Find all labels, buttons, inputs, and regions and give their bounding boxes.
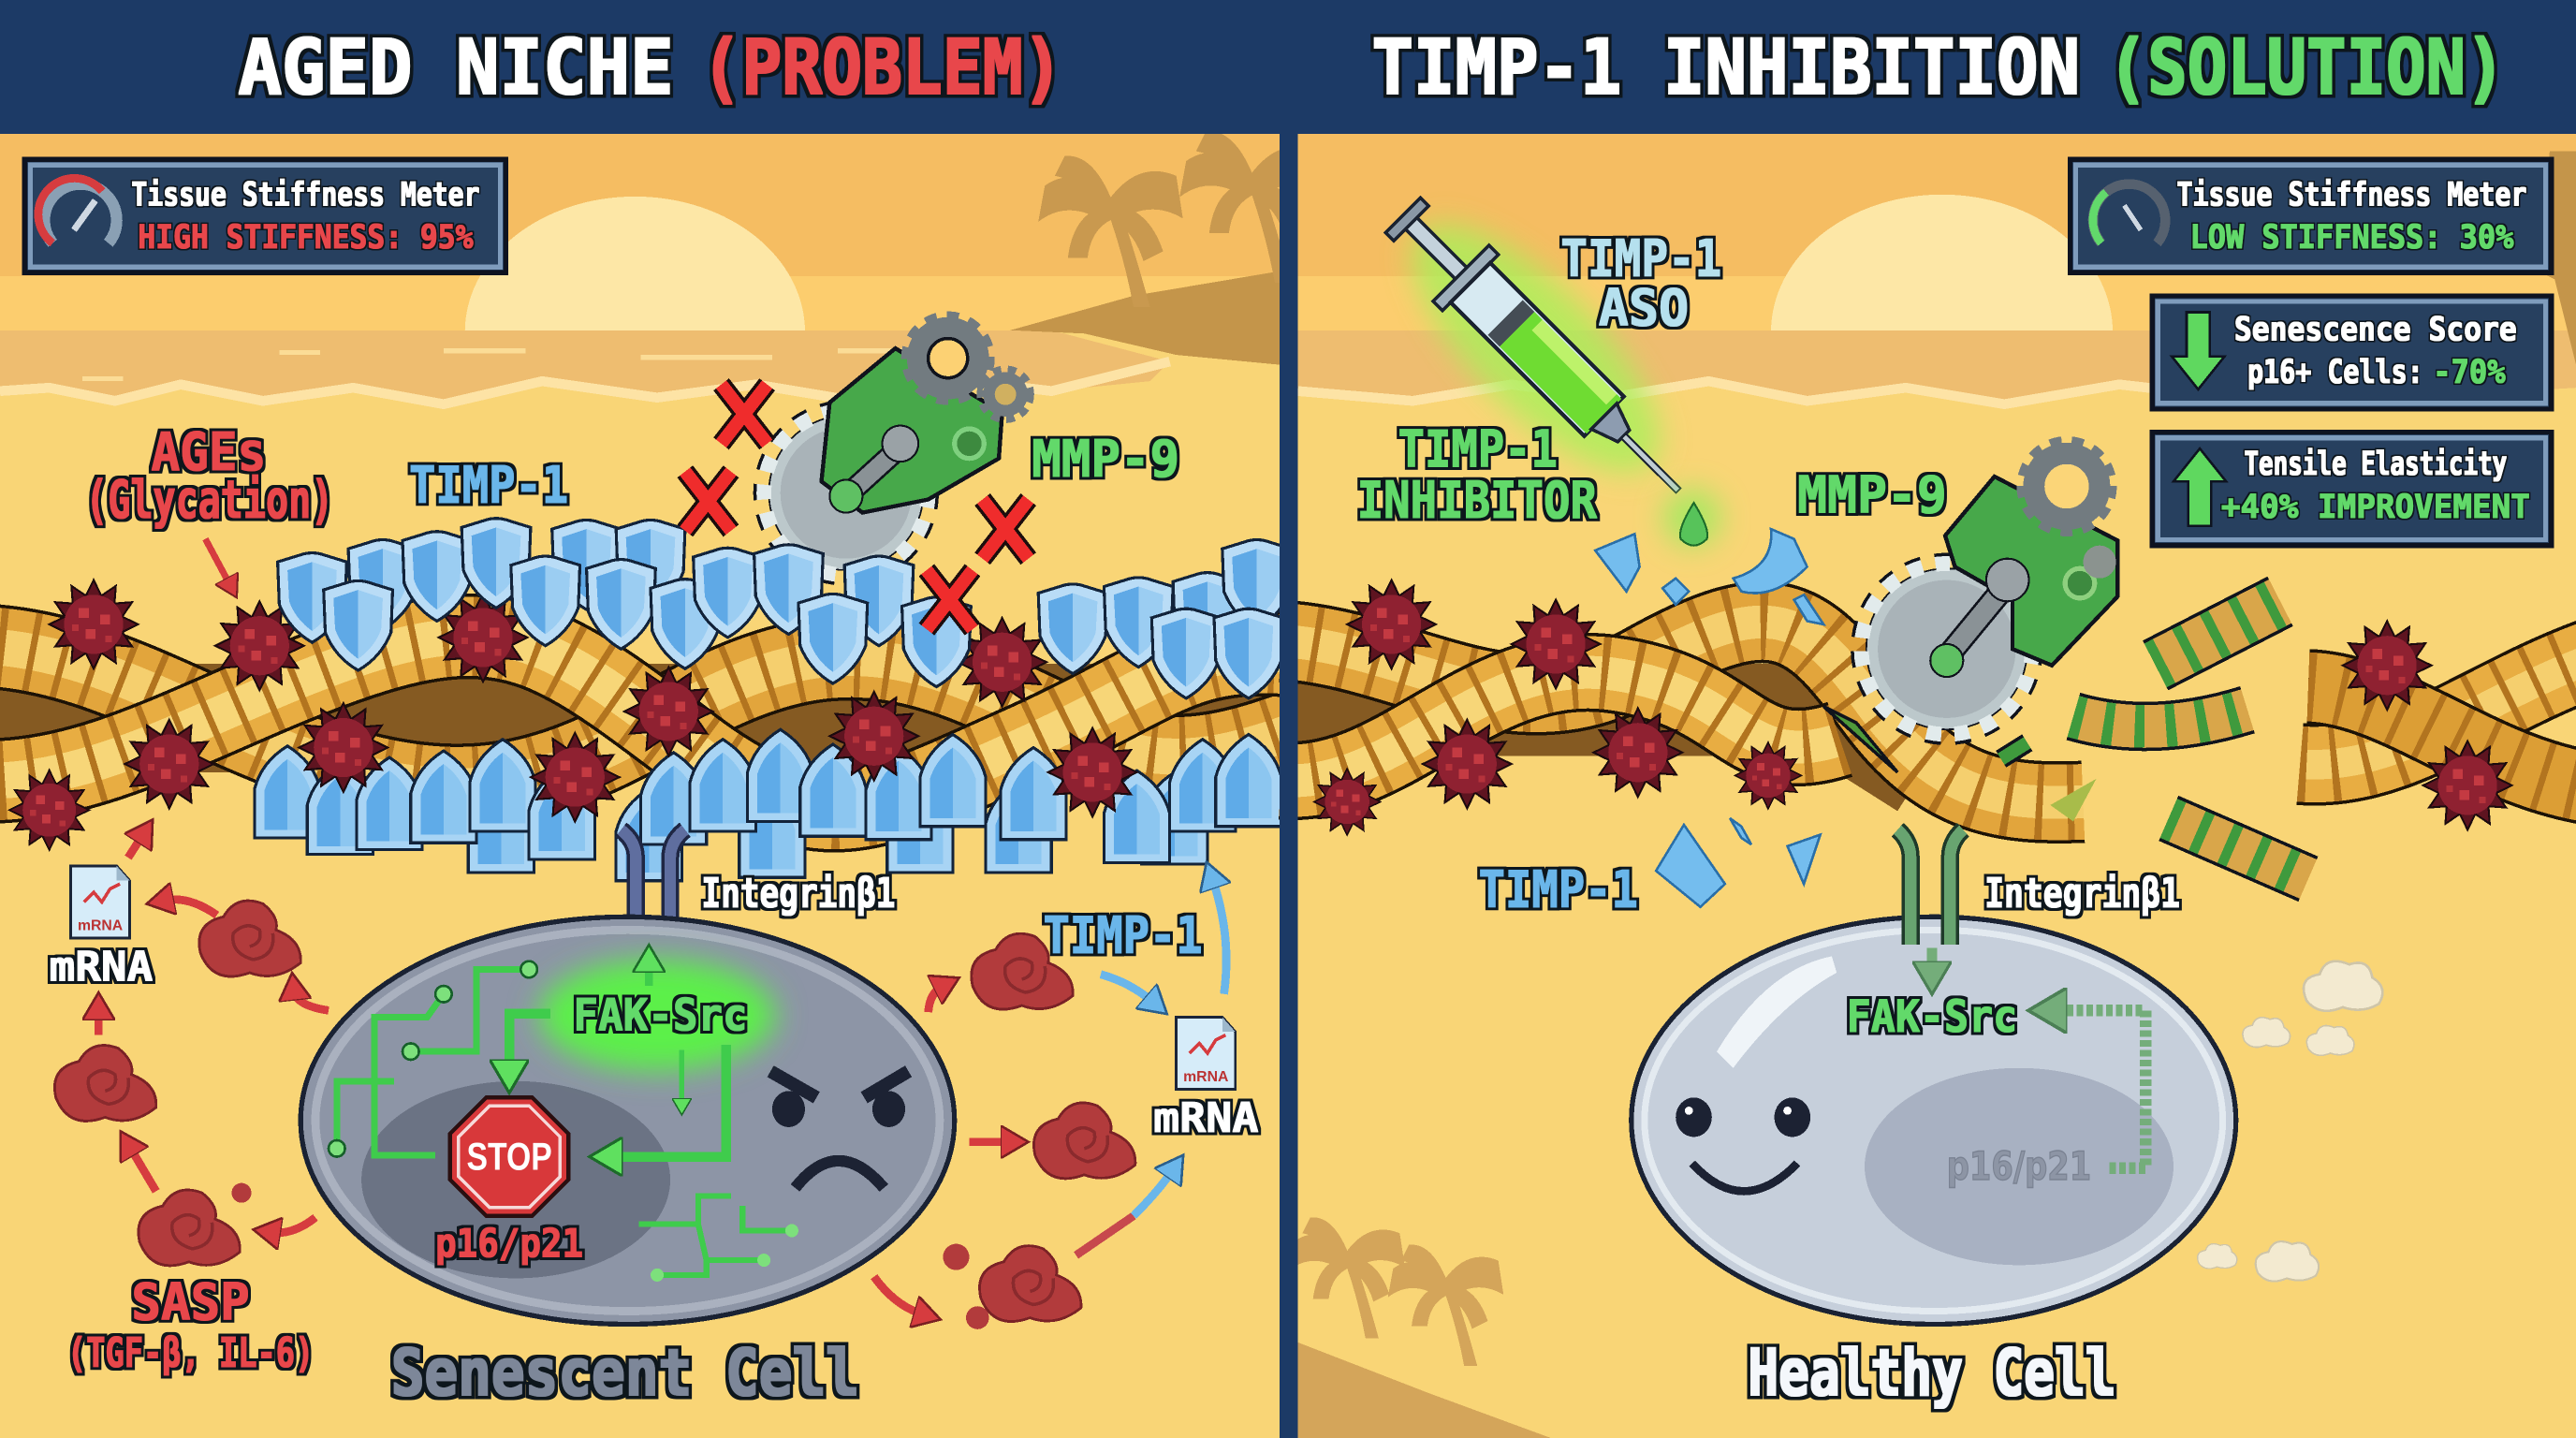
label: mRNA left: mRNA [50, 944, 153, 991]
label: integrin left: Integrinβ1 [701, 870, 896, 917]
icon: up arrow [2174, 448, 2226, 526]
red feedback arrows [98, 835, 1134, 1314]
label: TIMP-1 left: TIMP-1 [409, 456, 568, 515]
label: TIMP-1 fragments: TIMP-1 [1479, 860, 1638, 919]
title: TIMP-1 inhibition [1372, 24, 2506, 112]
stat panel: senescence score: -70% [2433, 353, 2506, 391]
AGEs crosslinks left [9, 580, 1137, 850]
smiling face [1676, 1097, 1810, 1191]
MMP-9 saw active, right [1862, 442, 2117, 734]
MMP-9 saw blocked, left [764, 317, 1030, 575]
inhibited pathway arrows [1932, 948, 2145, 1168]
stat panel: senescence score [2152, 296, 2552, 409]
SASP cytokine clouds [54, 901, 1135, 1329]
stat panel: tensile elasticity: +40% IMPROVEMENT [2221, 488, 2530, 526]
title: TIMP-1 inhibition: (SOLUTION) [2108, 24, 2506, 112]
background: left panel beach [0, 131, 1325, 1438]
p16/p21 label left: p16/p21 [435, 1221, 583, 1267]
stat panel: low stiffness [2070, 159, 2552, 272]
icon: down arrow [2172, 312, 2224, 389]
stat panel: low stiffness: LOW STIFFNESS: 30% [2190, 218, 2513, 257]
stat panel: senescence score: Senescence Score [2234, 310, 2517, 348]
label: mRNA right: mRNA [1153, 1094, 1258, 1142]
label: SASP: (TGF-β, IL-6) [67, 1329, 314, 1377]
label: MMP-9 right: MMP-9 [1797, 466, 1947, 525]
label: AGEs [85, 422, 333, 531]
AGEs crosslinks right [1314, 580, 2512, 835]
rope: left panel collagen [0, 637, 1314, 810]
nucleus [361, 1081, 670, 1278]
broken TIMP-1 shards [1595, 529, 1823, 907]
stat panel: senescence score: p16+ Cells: [2247, 353, 2423, 391]
ASO droplet [1662, 488, 1721, 547]
label: SASP [67, 1272, 314, 1377]
FAK-Src glow and circuits [329, 960, 798, 1282]
senescent cell [300, 917, 955, 1325]
stat panel: high stiffness: HIGH STIFFNESS: 95% [138, 218, 473, 257]
angry face [770, 1071, 909, 1188]
title: aged niche: (PROBLEM) [701, 24, 1063, 112]
stat panel: tensile elasticity [2152, 433, 2552, 546]
integrin beta1 left [621, 829, 685, 945]
upper TIMP-1 shield row [278, 519, 1292, 698]
clean exhaust clouds [2198, 961, 2382, 1282]
mRNA documents left panel [70, 866, 1236, 1090]
syringe: TIMP-1 ASO [1375, 187, 1706, 519]
label: TIMP-1 mRNA loop: TIMP-1 [1043, 906, 1203, 965]
stat panel: high stiffness: Tissue Stiffness Meter [131, 175, 479, 213]
title: TIMP-1 inhibition: TIMP-1 INHIBITION [1372, 24, 2080, 112]
label: TIMP-1 inhibitor: TIMP-1 [1398, 419, 1558, 478]
label: MMP-9 left: MMP-9 [1032, 430, 1179, 489]
label: FAK-Src right: FAK-Src [1847, 991, 2017, 1043]
stop sign [450, 1097, 568, 1216]
FAK-Src label left: FAK-Src [574, 990, 748, 1041]
icon: gauge low [2093, 184, 2165, 243]
blue TIMP-1 arrows [1101, 879, 1226, 1216]
label: p16/p21 right: p16/p21 [1947, 1143, 2091, 1189]
integrin beta1 right [1897, 829, 1963, 945]
icon: gauge high [38, 178, 117, 243]
label: AGEs: (Glycation) [85, 470, 333, 531]
label: AGEs: AGEs [151, 422, 266, 483]
label: TIMP-1 ASO [1560, 229, 1721, 337]
lower TIMP-1 shield row [255, 729, 1281, 881]
title: aged niche: AGED NICHE [238, 24, 674, 112]
label: TIMP-1 ASO: ASO [1599, 278, 1689, 337]
label: healthy cell: Healthy Cell [1748, 1336, 2116, 1411]
red X blocked marks [685, 385, 1029, 629]
label: SASP: SASP [131, 1272, 250, 1331]
stat panel: high stiffness [24, 159, 506, 272]
rope fragments with green digestion [1823, 601, 2308, 879]
label: senescent cell: Senescent Cell [391, 1336, 859, 1411]
label: TIMP-1 inhibitor [1357, 419, 1597, 530]
label: TIMP-1 ASO: TIMP-1 [1560, 229, 1721, 288]
nucleus [1865, 1068, 2174, 1265]
stop sign: STOP [466, 1135, 552, 1179]
label: TIMP-1 inhibitor: INHIBITOR [1357, 471, 1597, 530]
healthy cell [1632, 917, 2236, 1325]
background: right panel beach [1289, 133, 2576, 1438]
AGEs arrow [205, 539, 230, 585]
rope: right panel broken collagen [1281, 622, 2576, 802]
title: aged niche [238, 24, 1063, 112]
label: integrin right: Integrinβ1 [1984, 870, 2180, 917]
